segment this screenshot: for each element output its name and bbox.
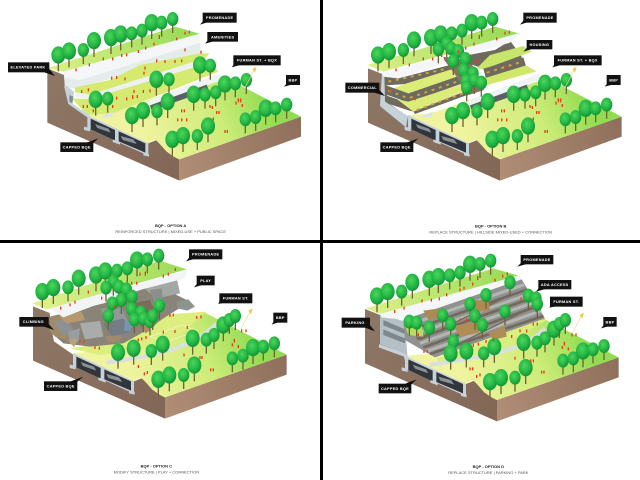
- panel: option A: [8, 12, 301, 234]
- label: Capped BQE: CAPPED BQE: [383, 146, 411, 150]
- label: Commercial: COMMERCIAL: [348, 86, 377, 90]
- caption: [429, 223, 552, 234]
- people: [76, 31, 242, 133]
- climbing rock wall: [50, 277, 195, 347]
- caption: MODIFY STRUCTURE | PLAY + CONNECTION: [114, 470, 199, 475]
- label: Furman St. + BQX: [552, 55, 602, 67]
- label: ADA Access: ADA ACCESS: [541, 283, 569, 287]
- label: Capped BQE: [379, 379, 417, 393]
- parking structure section: [379, 314, 408, 366]
- caption: [115, 223, 226, 234]
- label: BBP: [601, 317, 617, 328]
- label: Furman St.: [218, 293, 252, 304]
- slatted hillside: [403, 279, 547, 366]
- pin: Furman St.: [241, 308, 253, 329]
- upper lawn: [367, 27, 521, 72]
- label: Capped BQE: [60, 138, 98, 152]
- trees: [51, 12, 292, 156]
- caption: BQP - OPTION C: [141, 463, 172, 468]
- upper lawn: [47, 27, 201, 72]
- label: BBP: BBP: [606, 320, 615, 324]
- label: Housing: HOUSING: [529, 43, 549, 47]
- label: Capped BQE: [380, 138, 418, 152]
- label: BBP: [272, 313, 287, 325]
- panel: option B: [345, 12, 622, 234]
- caption: BQP - OPTION A: [155, 223, 186, 228]
- trees: [35, 249, 280, 396]
- upper lawn: [366, 268, 520, 314]
- trees: [371, 12, 612, 156]
- label: Capped BQE: CAPPED BQE: [381, 387, 409, 391]
- ground block with capped BQE tunnel: [47, 68, 301, 181]
- panel: option D: [342, 254, 619, 475]
- ground block with capped BQE tunnel: [365, 309, 619, 421]
- label: BBP: BBP: [289, 78, 298, 82]
- curved path and play field: [107, 323, 217, 363]
- label: Promenade: PROMENADE: [192, 253, 219, 257]
- label: Capped BQE: CAPPED BQE: [63, 146, 91, 150]
- pin: Furman St.: [572, 313, 584, 333]
- label: Parking: [342, 318, 375, 331]
- curved path: [430, 328, 545, 365]
- label: Promenade: PROMENADE: [526, 16, 554, 20]
- label: Promenade: [186, 249, 222, 261]
- label: Promenade: [517, 255, 553, 267]
- label: Climbing: CLIMBING: [23, 320, 44, 324]
- label: Furman St.: [549, 297, 583, 308]
- ground block with capped BQE tunnel: [368, 68, 622, 181]
- label: Elevated Park: [8, 62, 55, 76]
- promenade deck: [63, 33, 201, 80]
- caption: REINFORCED STRUCTURE | MIXED-USE + PUBLIC SPACE: [115, 229, 226, 234]
- people: [61, 268, 246, 375]
- people: [390, 31, 562, 133]
- label: BBP: [284, 75, 300, 87]
- people: [395, 272, 576, 378]
- label: Promenade: PROMENADE: [206, 16, 233, 20]
- label: Promenade: [520, 13, 557, 25]
- label: Capped BQE: [44, 377, 83, 391]
- label: Play: PLAY: [200, 279, 211, 283]
- label: BBP: BBP: [276, 316, 285, 320]
- label: Play: [194, 276, 215, 287]
- label: Furman St. + BQX: [232, 55, 281, 67]
- label: Elevated Park: ELEVATED PARK: [11, 66, 45, 70]
- promenade deck: [382, 33, 521, 78]
- label: BBP: [605, 75, 621, 87]
- caption: BQP - OPTION D: [473, 464, 504, 469]
- caption: [448, 464, 529, 475]
- upper lawn: [32, 261, 187, 309]
- label: Parking: PARKING: [345, 321, 365, 325]
- caption: [114, 463, 199, 475]
- label: ADA Access: [536, 280, 571, 292]
- promenade deck: [50, 271, 187, 317]
- pin: Furman St.: [565, 67, 577, 87]
- label: Furman St. + BQX: FURMAN ST. + BQX: [237, 59, 277, 63]
- label: Capped BQE: CAPPED BQE: [47, 385, 75, 389]
- label: Furman St.: FURMAN ST.: [223, 297, 249, 301]
- panel: option C: [19, 249, 287, 475]
- label: Commercial: [345, 83, 385, 96]
- caption: REPLACE STRUCTURE | HILLSIDE MIXED-USED + CONNECTION: [429, 229, 552, 234]
- trees: [370, 254, 610, 398]
- ground block with capped BQE tunnel: [33, 306, 287, 419]
- housing and commercial floors: [380, 41, 547, 127]
- label: Climbing: [19, 317, 54, 330]
- caption: BQP - OPTION B: [475, 223, 506, 228]
- caption: REPLACE STRUCTURE | PARKING + PARK: [448, 470, 529, 475]
- lower lawn extension: [70, 312, 207, 355]
- label: Housing: [523, 40, 552, 52]
- pin: Furman St.: [245, 67, 257, 87]
- label: Amenities: [205, 32, 238, 44]
- elevated park terraces: [64, 43, 227, 118]
- label: BBP: BBP: [609, 78, 618, 82]
- label: Furman St. + BQX: FURMAN ST. + BQX: [558, 59, 598, 63]
- label: Promenade: [200, 13, 237, 25]
- label: Amenities: AMENITIES: [211, 35, 234, 39]
- promenade deck: [380, 275, 522, 320]
- label: Furman St.: FURMAN ST.: [553, 300, 579, 304]
- label: Promenade: PROMENADE: [523, 258, 551, 262]
